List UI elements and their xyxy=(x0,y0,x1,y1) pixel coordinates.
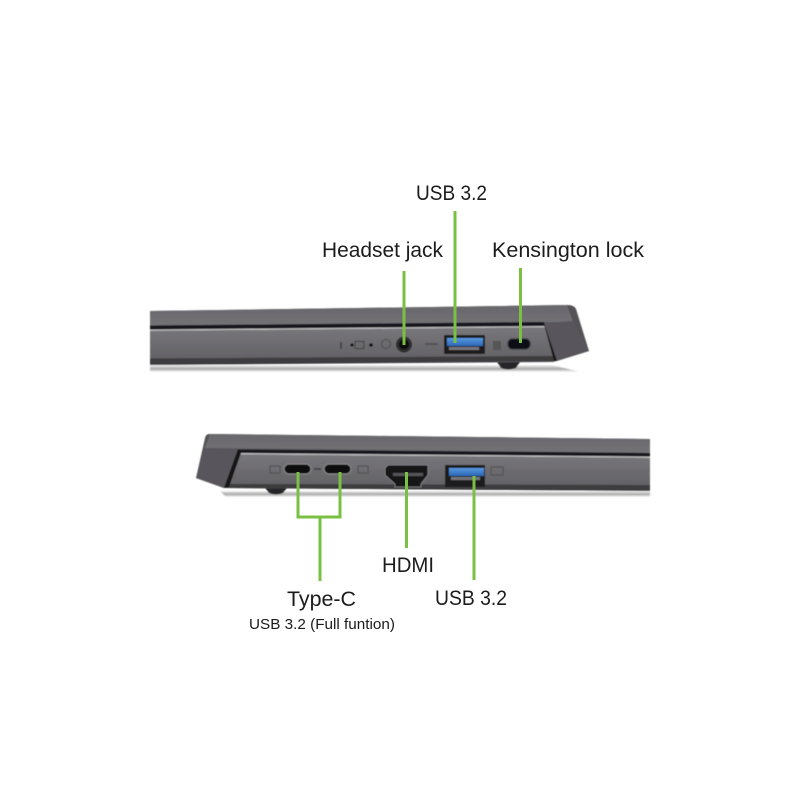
label: Headset jack: Headset jack xyxy=(322,238,443,262)
port face xyxy=(230,454,650,485)
Kensington lock slot xyxy=(508,338,530,350)
icon: status indicators xyxy=(340,342,373,349)
top laptop: right side view xyxy=(150,305,589,372)
base dark edge xyxy=(150,356,554,365)
lid face xyxy=(150,305,573,326)
lid face xyxy=(205,434,650,453)
icon: battery-charge symbol xyxy=(491,467,503,475)
highlight line xyxy=(150,326,545,331)
leader: headset jack xyxy=(402,271,406,345)
label: HDMI: HDMI xyxy=(382,553,434,577)
lid and hinge silhouette xyxy=(150,305,589,365)
icon: USB symbol xyxy=(425,343,438,345)
leader: Kensington lock xyxy=(519,268,522,343)
USB 3.2 port, top xyxy=(444,335,485,354)
leader: HDMI xyxy=(405,472,408,548)
port face xyxy=(150,328,553,358)
icon: right Type-C symbol xyxy=(358,466,368,473)
leader: bottom USB 3.2 xyxy=(472,476,476,580)
highlight line xyxy=(240,453,650,458)
bottom laptop: left side view xyxy=(196,434,650,497)
lid and hinge silhouette xyxy=(196,434,650,491)
leader: Type-C bracket xyxy=(298,472,340,581)
label: USB 3.2 bottom: USB 3.2 xyxy=(435,586,507,610)
foot xyxy=(265,488,287,494)
shadow under bottom laptop xyxy=(220,491,650,497)
icon: left Type-C symbol xyxy=(270,466,280,473)
HDMI port xyxy=(385,465,428,487)
Type-C port right xyxy=(324,464,351,474)
label: Kensington lock: Kensington lock xyxy=(492,238,644,262)
base dark edge xyxy=(226,484,650,491)
icon: lock symbol xyxy=(493,341,501,350)
leader lines xyxy=(298,211,520,581)
groove xyxy=(238,450,650,456)
headset jack port xyxy=(396,336,412,352)
hinge block xyxy=(196,448,238,488)
shadow under top laptop xyxy=(150,365,580,372)
label: Type-C: Type-C xyxy=(287,587,356,611)
USB 3.2 port, bottom xyxy=(445,465,485,487)
icon: headset symbol xyxy=(382,340,390,348)
groove xyxy=(150,322,546,330)
Type-C dashes xyxy=(314,468,321,470)
label: USB 3.2 top: USB 3.2 xyxy=(416,181,487,205)
Type-C port left xyxy=(284,464,311,474)
hinge block xyxy=(544,321,589,361)
label: Type-C detail: USB 3.2 (Full funtion) xyxy=(249,617,395,633)
foot xyxy=(497,362,520,370)
leader: top USB 3.2 xyxy=(454,211,456,343)
